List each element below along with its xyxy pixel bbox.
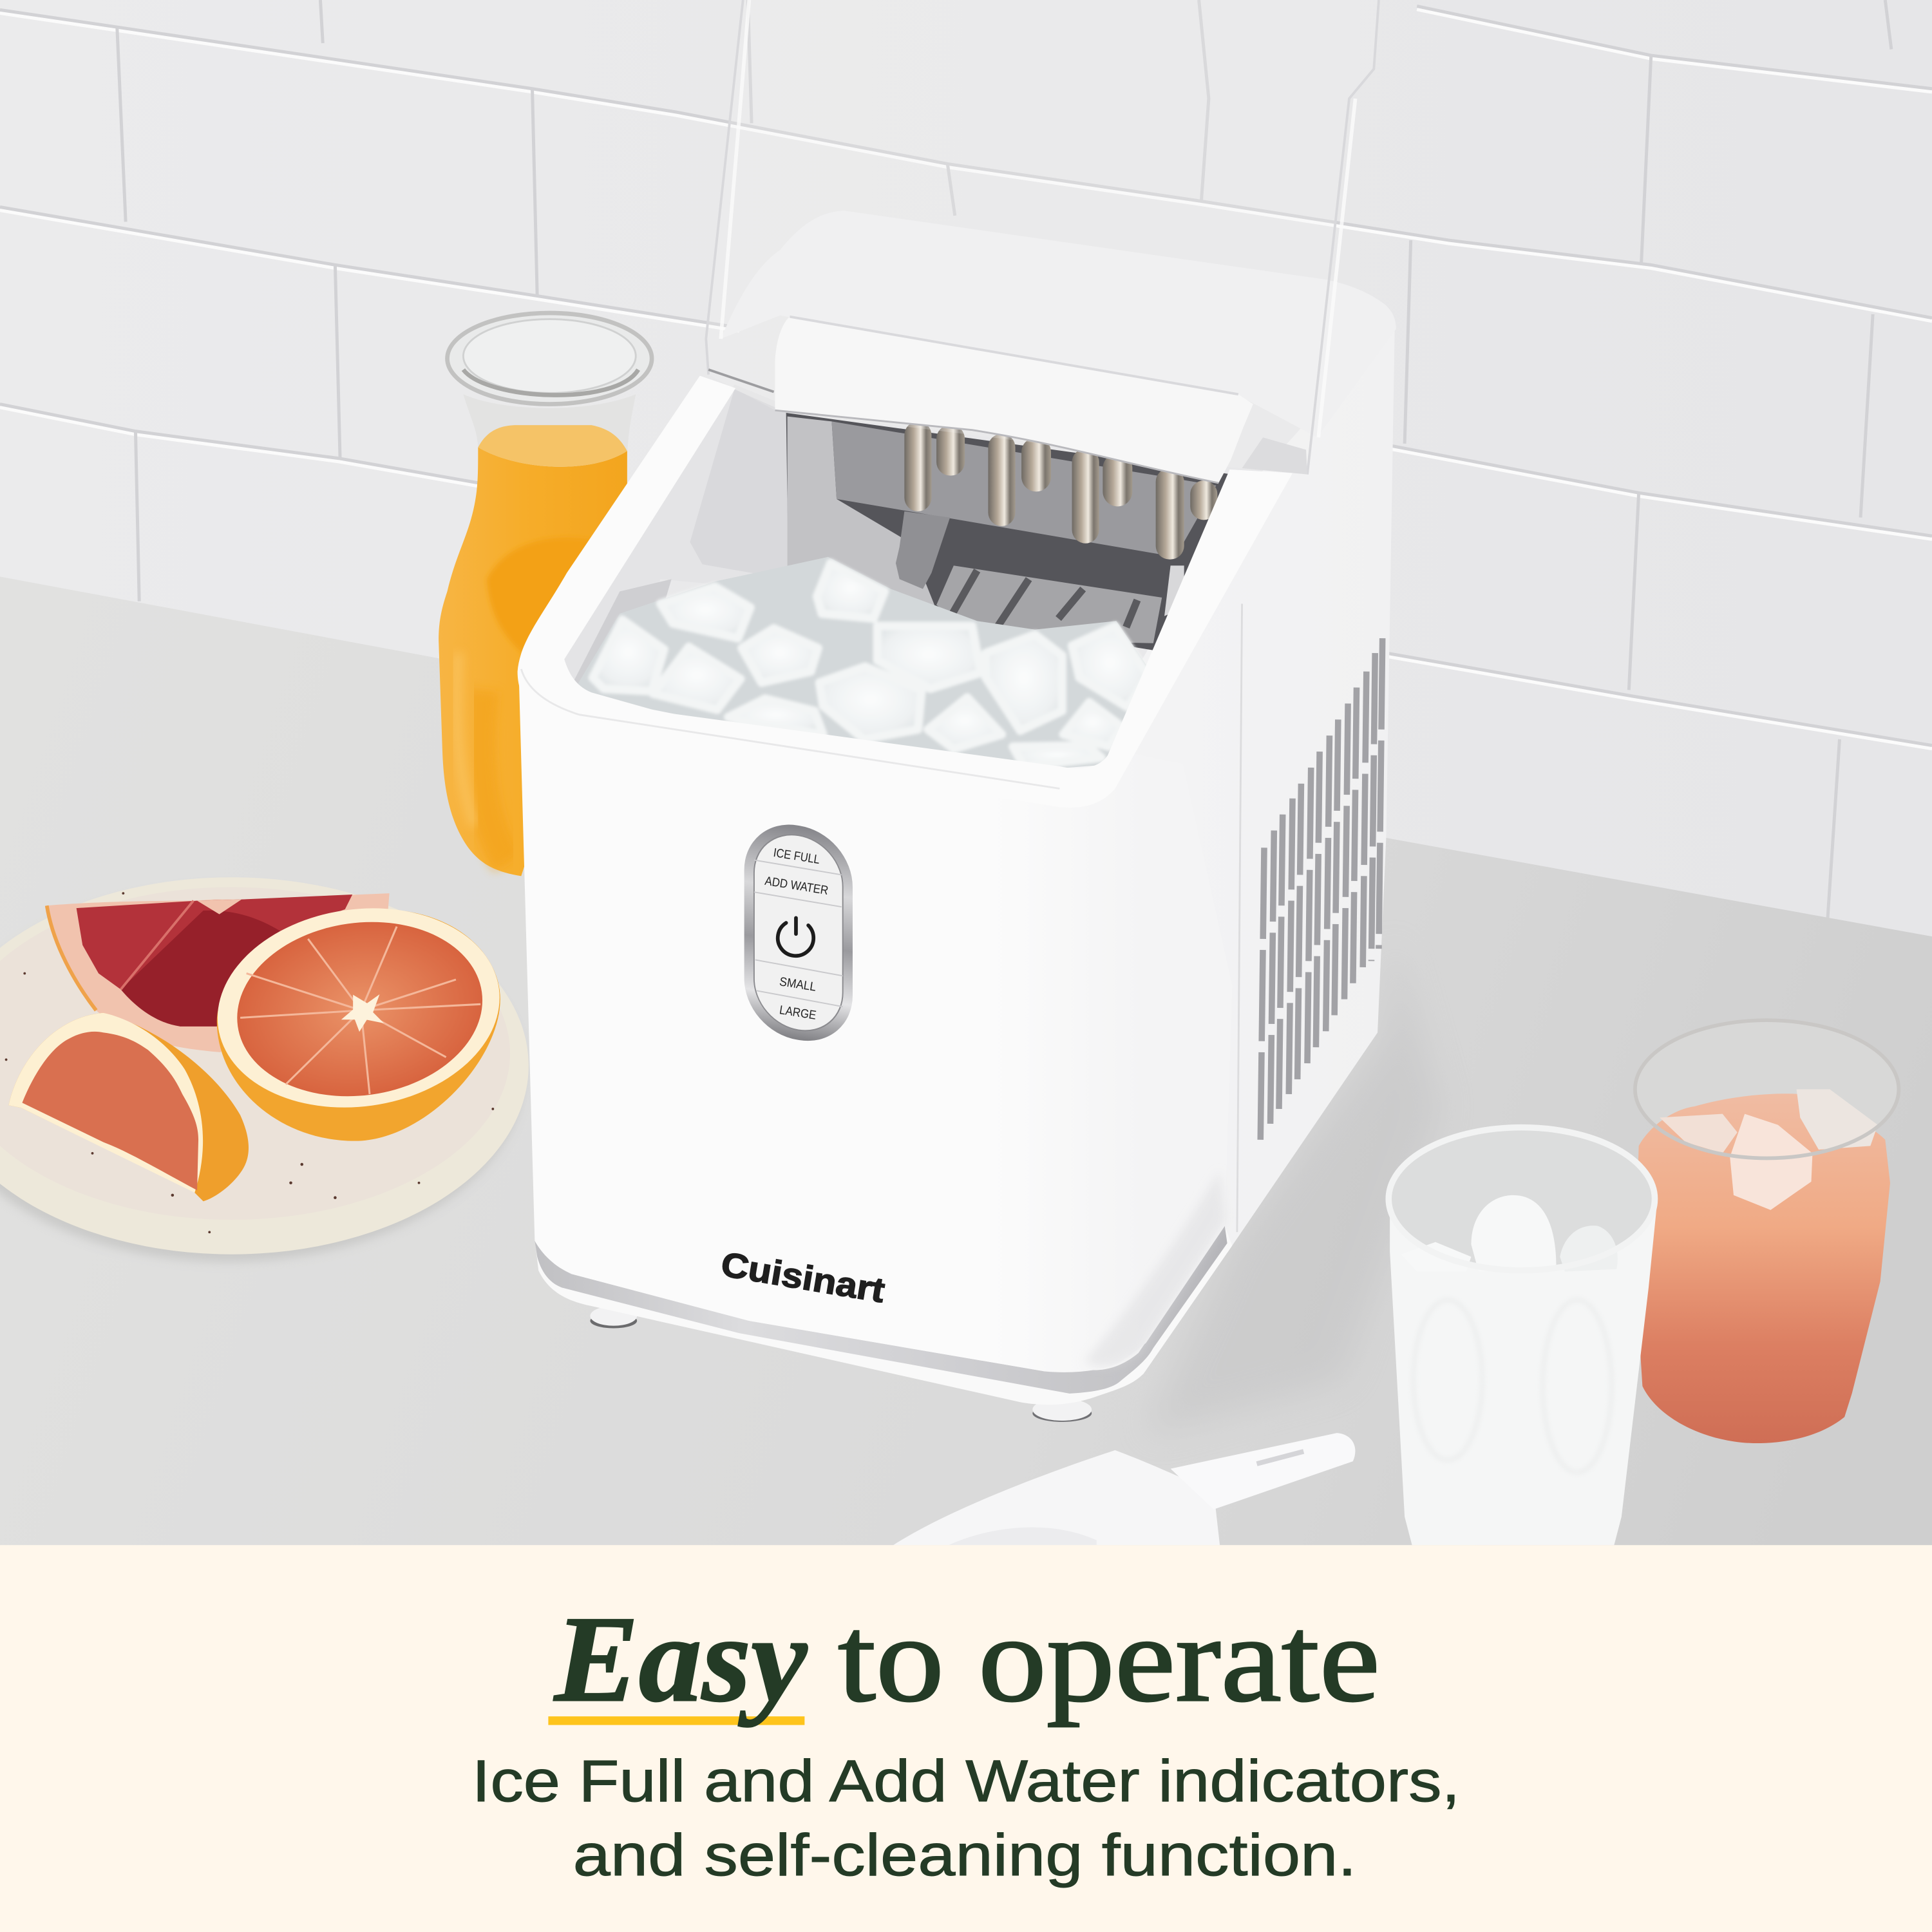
- orange segments: [240, 927, 480, 1094]
- hinge arm: [896, 511, 950, 589]
- control panel: [744, 817, 853, 1048]
- glass with grapefruit drink: [1635, 1019, 1899, 1443]
- heading: to operate: [838, 1591, 1380, 1727]
- front panel: [518, 672, 1232, 1372]
- orange body: [205, 891, 513, 1141]
- caption panel: [0, 1545, 1932, 1932]
- tiled wall background: [0, 0, 1932, 961]
- transparent lid panel: [706, 0, 1379, 475]
- right side panel: [1059, 323, 1395, 1397]
- front rim of opening: [518, 376, 1293, 808]
- subheading: and self-cleaning function.: [573, 1823, 1357, 1888]
- carafe of orange juice: [439, 312, 653, 876]
- orange wedge: [8, 1013, 249, 1201]
- glass with ice: [1387, 1128, 1657, 1545]
- carafe glass: [446, 312, 653, 456]
- inner left wall: [542, 384, 788, 715]
- ice in drink: [1660, 1089, 1878, 1210]
- back interior: [786, 413, 1232, 653]
- juice: [439, 425, 627, 876]
- glass rim: [1635, 1020, 1899, 1158]
- ice scoop: [893, 1433, 1355, 1545]
- ice maker: [518, 0, 1396, 1422]
- feet: [590, 1306, 1092, 1422]
- glass back: [1635, 1019, 1899, 1159]
- stainless base strip: [535, 1226, 1227, 1394]
- glass body: [1387, 1128, 1657, 1545]
- countertop: [0, 576, 1932, 1553]
- indicator labels: ICE FULL: [772, 846, 820, 867]
- drink: [1635, 1094, 1890, 1443]
- glass rim: [1388, 1128, 1655, 1271]
- indicator labels: [764, 846, 829, 1023]
- plate with citrus: [0, 877, 529, 1262]
- halved orange: [205, 891, 513, 1141]
- indicator labels: SMALL: [779, 975, 817, 994]
- ice cubes in glass: [1401, 1195, 1618, 1271]
- subheading: Ice Full and Add Water indicators,: [472, 1748, 1460, 1814]
- metal rods: [904, 421, 1217, 560]
- heading: Easy: [553, 1591, 808, 1727]
- grapefruit wedge: [47, 893, 390, 1052]
- heading: [553, 1591, 1380, 1727]
- indicator labels: LARGE: [779, 1003, 817, 1023]
- heading underline: [548, 1716, 804, 1725]
- frosted pattern: [1414, 1300, 1612, 1472]
- white lid: [721, 211, 1396, 437]
- subheading: [472, 1748, 1460, 1888]
- bottom lip: [535, 1226, 1232, 1405]
- panel divider lines: [754, 860, 843, 1007]
- counter shadow of appliance: [1146, 936, 1442, 1435]
- lid front lip: [775, 317, 1253, 483]
- indicator labels: ADD WATER: [764, 875, 829, 898]
- icon: power: [778, 918, 813, 956]
- ice cubes: [574, 557, 1153, 772]
- carafe rim: [448, 313, 652, 404]
- air vent slats: [1260, 638, 1383, 1140]
- Cuisinart logo: Cuisinart: [718, 1245, 887, 1310]
- plate: [0, 877, 529, 1262]
- chrome bezel: [744, 817, 853, 1048]
